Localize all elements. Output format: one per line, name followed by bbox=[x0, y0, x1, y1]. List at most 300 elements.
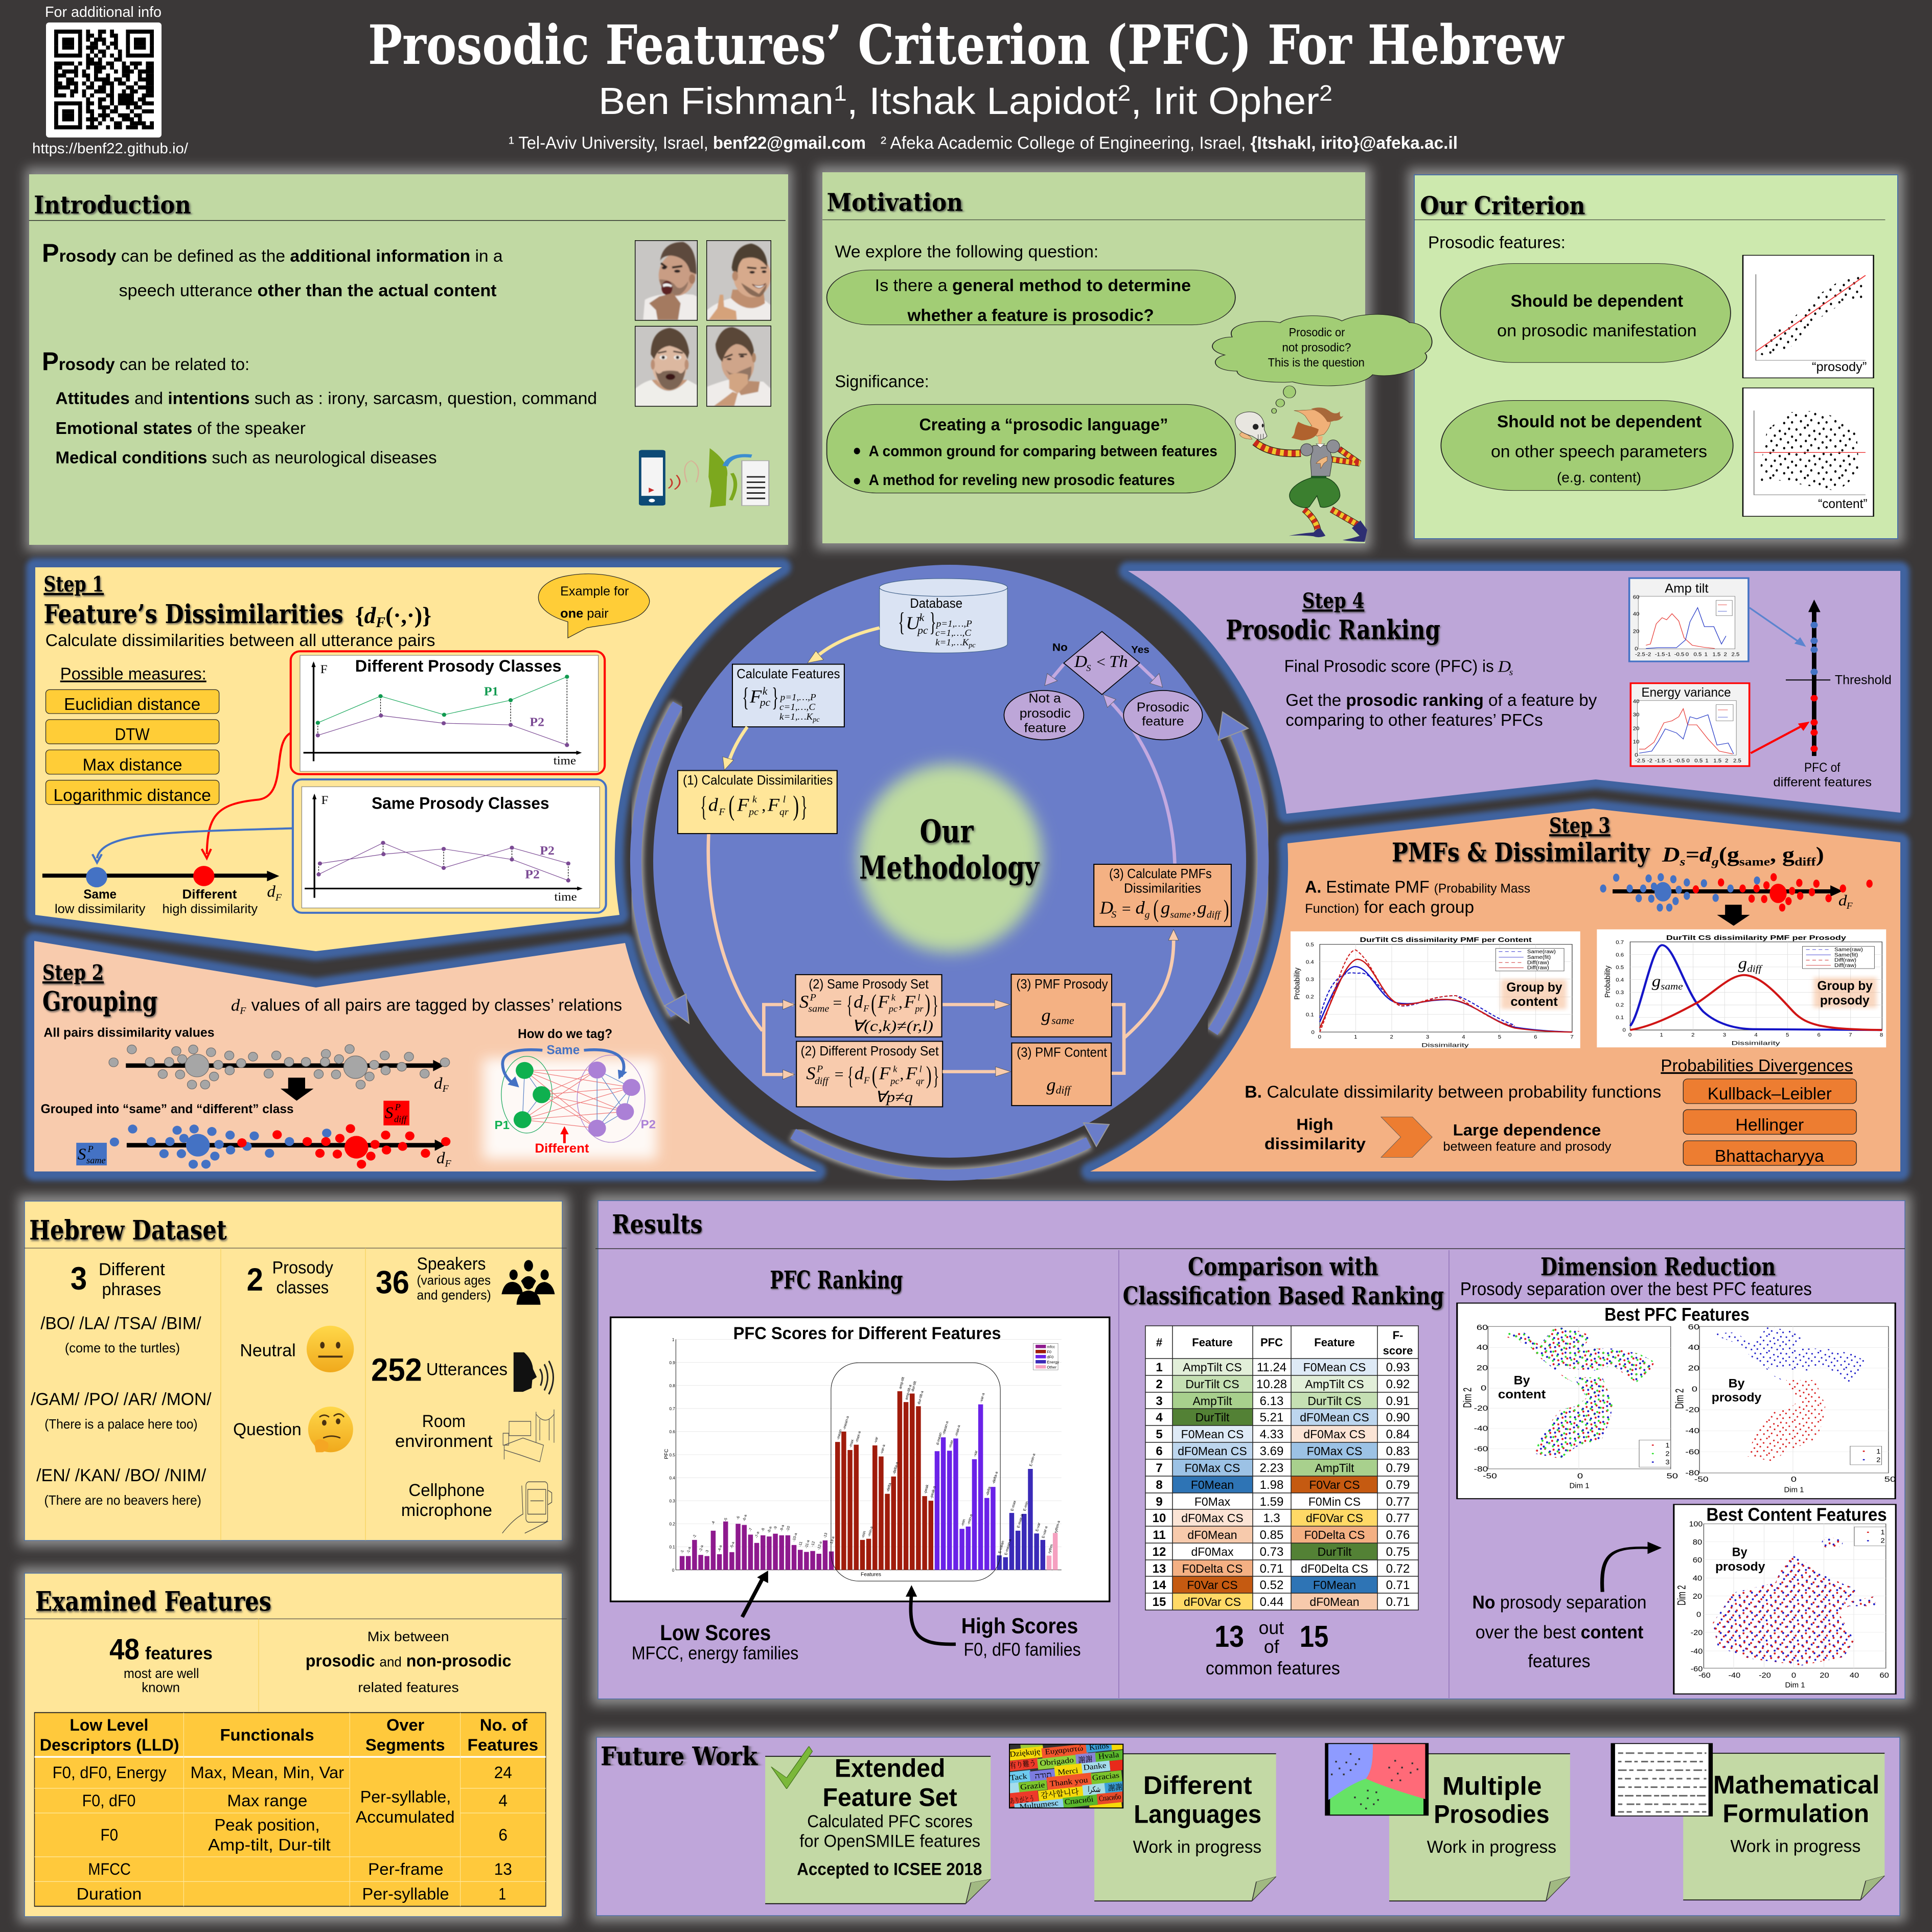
table: comparison ranking: 4 bbox=[1156, 1411, 1163, 1424]
table: comparison ranking: dF0Max CS bbox=[1181, 1511, 1244, 1525]
divergence buttons: Kullback–Leibler bbox=[1708, 1085, 1832, 1103]
bar labels: -4 bbox=[710, 1521, 716, 1525]
bar labels: -3 bbox=[704, 1550, 709, 1554]
column: speakers and utterances: Room bbox=[422, 1411, 466, 1431]
column: phrases: /GAM/ /PO/ /AR/ /MON/ bbox=[31, 1389, 212, 1409]
table: comparison ranking: Feature bbox=[1192, 1336, 1233, 1349]
chart: same prosody classes bbox=[293, 779, 606, 913]
table: comparison ranking: 11 bbox=[1153, 1528, 1166, 1542]
chart: different prosody classes: Different Prosody Classes bbox=[355, 657, 562, 676]
box: PMF Content bbox=[1011, 1043, 1111, 1106]
chart: different prosody classes: P1 bbox=[484, 685, 498, 698]
box: Different Prosody Set: F bbox=[863, 1075, 870, 1086]
chart: Energy variance: 2 bbox=[1725, 758, 1729, 764]
text: final prosodic score: D bbox=[1498, 658, 1511, 676]
chart: same prosody classes: time bbox=[554, 890, 577, 904]
table: comparison ranking: dF0Mean bbox=[1309, 1595, 1360, 1608]
box: Calculate Dissimilarities: d bbox=[708, 795, 718, 815]
scatter: by content: 1 bbox=[1665, 1441, 1670, 1449]
box: Different Prosody Set: S bbox=[806, 1063, 816, 1084]
math: Ds: diff bbox=[1795, 856, 1816, 868]
chart: different prosody classes: F bbox=[320, 662, 328, 676]
box: Different Prosody Set: d bbox=[855, 1063, 864, 1084]
bar labels: -min bbox=[960, 1519, 967, 1527]
axis: dF same vs different: d bbox=[267, 883, 276, 901]
text: high scores: High Scores bbox=[961, 1614, 1078, 1638]
scatter: by prosody: By bbox=[1729, 1376, 1745, 1390]
math: dF: (·,·)} bbox=[385, 603, 431, 629]
table: comparison ranking: dF0Mean bbox=[1187, 1528, 1237, 1542]
icon: phone listening bbox=[639, 450, 698, 505]
box: Same Prosody Set: S bbox=[799, 992, 809, 1012]
table: comparison ranking: 0.75 bbox=[1386, 1545, 1410, 1559]
table: comparison ranking: 0.83 bbox=[1386, 1444, 1410, 1458]
note: multiple prosodies bbox=[1389, 1754, 1570, 1901]
table: comparison ranking: F0Mean CS bbox=[1181, 1428, 1244, 1441]
table: comparison ranking: F0Var CS bbox=[1187, 1578, 1238, 1592]
column: speakers and utterances: Utterances bbox=[426, 1359, 508, 1379]
bar labels: -max bbox=[848, 1439, 855, 1448]
box: Same Prosody Set: ∀(c,k)≠(r,l) bbox=[852, 1017, 933, 1034]
legs bbox=[1304, 510, 1358, 530]
table: comparison ranking: F0Delta CS bbox=[1304, 1528, 1365, 1542]
image: thank you in many languages: شكرا bbox=[1088, 1785, 1100, 1794]
arrow: to content chart bbox=[1602, 1542, 1662, 1592]
table: comparison ranking: 12 bbox=[1153, 1545, 1166, 1559]
chart: Amp tilt: -1.5 bbox=[1655, 652, 1665, 658]
chart: best content features: 0 bbox=[1791, 1671, 1796, 1680]
chart: PFC scores bbox=[611, 1317, 1110, 1601]
table: feature breakdown: Duration bbox=[77, 1885, 142, 1903]
measure buttons: DTW bbox=[115, 725, 150, 744]
table: comparison ranking: 0.85 bbox=[1260, 1528, 1283, 1542]
scatter: by prosody: -40 bbox=[1685, 1427, 1699, 1435]
table: feature breakdown: Per-syllable bbox=[362, 1885, 449, 1903]
bar labels: -mean bbox=[836, 1429, 843, 1440]
chart: Energy variance: 40 bbox=[1633, 699, 1639, 704]
diagram: how do we tag: P1 bbox=[495, 1118, 510, 1132]
database bbox=[880, 579, 1007, 653]
text: dF values tagged: values of all pairs are tagged by classes’ relations bbox=[251, 996, 622, 1015]
bar labels: -7 bbox=[748, 1528, 753, 1532]
callout: example for one pair: Example for bbox=[560, 585, 629, 599]
table: feature breakdown: Over bbox=[386, 1716, 424, 1735]
affiliations: ² Afeka Academic College of Engineering, Israel, {Itshakl, irito}@afeka.ac.il bbox=[881, 133, 1458, 153]
box: Different Prosody Set: k bbox=[893, 1064, 898, 1074]
outcome: not a prosodic feature: prosodic bbox=[1020, 706, 1071, 721]
box: Same Prosody Set: { bbox=[846, 991, 853, 1019]
chart: Amp tilt: 1.5 bbox=[1713, 652, 1720, 658]
panel: Future Work: Languages bbox=[1134, 1800, 1261, 1828]
text: prosody definition: speech utterance other than the actual content bbox=[119, 281, 497, 300]
diagram: how do we tag: How do we tag? bbox=[518, 1027, 612, 1041]
box: Different Prosody Set: qr bbox=[916, 1076, 924, 1086]
chart: PFC scores: 0.9 bbox=[670, 1361, 675, 1365]
image: thank you in many languages: Danke bbox=[1083, 1761, 1107, 1772]
scatter: by content: -60 bbox=[1474, 1445, 1488, 1453]
heading: Introduction: Introduction bbox=[34, 191, 191, 219]
chart: PMF per prosody: 0 bbox=[1628, 1032, 1631, 1038]
table: comparison ranking: DurTilt CS bbox=[1185, 1377, 1239, 1391]
label: S diff: S bbox=[385, 1104, 393, 1122]
chart: same prosody classes: F bbox=[321, 794, 328, 807]
chart: PMF per prosody: 3 bbox=[1723, 1032, 1726, 1038]
arrow: red link to different bbox=[202, 733, 291, 858]
bar labels: -min-a bbox=[966, 1513, 974, 1525]
panel: Introduction bbox=[26, 168, 792, 551]
arrow: split into sets bbox=[764, 1000, 795, 1079]
arrow: database to features bbox=[808, 628, 880, 663]
column: phrases: (There is a palace here too) bbox=[44, 1417, 198, 1431]
bar labels: E-var bbox=[1034, 1522, 1042, 1532]
chart: PMF per prosody: g bbox=[1738, 955, 1747, 973]
scatter: by prosody: -80 bbox=[1685, 1469, 1699, 1477]
chart: Amp tilt: 40 bbox=[1633, 611, 1639, 617]
text: prosodic ranking: comparing to other features’ PFCs bbox=[1285, 710, 1543, 729]
bar labels: E-max bbox=[1009, 1500, 1017, 1511]
table: comparison ranking: 15 bbox=[1153, 1595, 1166, 1609]
bar labels: -var-a bbox=[978, 1392, 986, 1403]
measure buttons bbox=[46, 689, 219, 805]
heading: Step 4: Step 4 bbox=[1302, 589, 1364, 613]
box: Same Prosody Set: (2) Same Prosody Set bbox=[809, 976, 929, 992]
scatter: by prosody bbox=[1673, 1323, 1896, 1494]
table: comparison ranking: 1 bbox=[1156, 1361, 1163, 1374]
photo: thoughtful face bbox=[707, 326, 771, 406]
column: speakers and utterances: microphone bbox=[401, 1500, 492, 1520]
box: Calculate Features: c=1,…,C bbox=[779, 702, 816, 712]
label: S same: P bbox=[87, 1144, 94, 1154]
box: Same Prosody Set: F bbox=[904, 992, 916, 1012]
box: Calculate PMFs Dissimilarities: D bbox=[1099, 898, 1113, 917]
box: Same Prosody Set: ( bbox=[871, 989, 877, 1017]
text: low scores: MFCC, energy families bbox=[632, 1643, 798, 1664]
stat: 13 out of 15: out bbox=[1259, 1618, 1284, 1638]
scatter: by prosody: 60 bbox=[1688, 1323, 1699, 1331]
panel: Step 2 background bbox=[34, 941, 817, 1171]
scatter: by prosody: 2 bbox=[1876, 1456, 1880, 1464]
text: prosody definition bbox=[42, 239, 503, 300]
legend: PFC chart: Energy bbox=[1047, 1360, 1059, 1365]
table: comparison ranking: 3 bbox=[1156, 1394, 1163, 1408]
box: Calculate PMFs Dissimilarities: d bbox=[1135, 898, 1145, 917]
outcome: prosodic feature: Prosodic bbox=[1137, 701, 1189, 715]
table: comparison ranking: dF0Mean CS bbox=[1178, 1444, 1247, 1458]
image: thank you in many languages: 謝謝 bbox=[1078, 1755, 1093, 1765]
arrow: high scores bbox=[906, 1585, 956, 1644]
box: PMF Prosody bbox=[1011, 974, 1112, 1037]
chart: best content features: 40 bbox=[1693, 1574, 1702, 1583]
box: Different Prosody Set: ∀p≠q bbox=[875, 1089, 913, 1106]
box: Calculate PMFs Dissimilarities: Dissimilarities bbox=[1124, 881, 1201, 895]
box: Calculate Features: k=1,…K bbox=[779, 711, 813, 722]
column: prosody classes bbox=[233, 1257, 334, 1439]
scatter: by content: 60 bbox=[1477, 1324, 1488, 1332]
table: comparison ranking: F0Mean CS bbox=[1303, 1361, 1366, 1374]
box: Calculate PMFs Dissimilarities: same bbox=[1170, 910, 1191, 920]
chart: PMF per content: Same(fit) bbox=[1527, 955, 1551, 960]
axis: dF same vs different: Different bbox=[182, 888, 237, 902]
chart: Amp tilt: -1 bbox=[1666, 652, 1671, 658]
content: Step 3 bbox=[1245, 814, 1886, 1166]
pill: should not be dependent: on other speech parameters bbox=[1491, 442, 1707, 461]
chart: PMF per prosody: 0.4 bbox=[1616, 977, 1624, 983]
authors: 1 bbox=[834, 81, 847, 106]
table: comparison ranking: 4.33 bbox=[1260, 1428, 1283, 1441]
label: dF lower: d bbox=[436, 1149, 445, 1167]
methodology circle bbox=[653, 565, 1246, 1158]
bar labels: dur-tilt bbox=[910, 1381, 917, 1392]
legend: PFC chart: Other bbox=[1047, 1365, 1057, 1369]
box: Different Prosody Set: { bbox=[847, 1062, 854, 1090]
chart: Energy variance bbox=[1630, 683, 1750, 766]
bar labels: E-min-a bbox=[1028, 1453, 1037, 1467]
arrow: blue link to same bbox=[93, 829, 292, 863]
box: Calculate Dissimilarities: l bbox=[783, 794, 786, 805]
table: comparison ranking: DurTilt CS bbox=[1307, 1394, 1362, 1408]
table: comparison ranking: dF0Max bbox=[1191, 1545, 1234, 1558]
icon: group of people bbox=[501, 1260, 555, 1305]
bar labels: amp-tilt-a bbox=[904, 1384, 912, 1400]
chart: same prosody classes: P2 bbox=[540, 844, 555, 858]
column: phrases: (There are no beavers here) bbox=[44, 1493, 201, 1507]
bars: mfcc bbox=[680, 1522, 834, 1570]
box: Same Prosody Set: d bbox=[854, 992, 863, 1012]
icon: speaking head bbox=[514, 1352, 553, 1394]
chart: best content features: 80 bbox=[1693, 1538, 1702, 1547]
chart: best content features: 100 bbox=[1689, 1520, 1703, 1528]
affiliations bbox=[509, 133, 1458, 153]
decision: threshold diamond: S bbox=[1086, 663, 1091, 673]
stat: 13 out of 15 bbox=[1206, 1618, 1340, 1678]
text: low scores bbox=[632, 1621, 798, 1664]
table: comparison ranking: AmpTilt CS bbox=[1183, 1361, 1242, 1374]
text: no prosody separation bbox=[1473, 1592, 1646, 1671]
chart: best content features: 20 bbox=[1820, 1671, 1829, 1680]
image: thank you in many languages: Grazie bbox=[1020, 1781, 1045, 1792]
chart: best content features: -60 bbox=[1698, 1671, 1711, 1680]
table: comparison ranking: F- bbox=[1393, 1329, 1403, 1342]
bar labels: -peak-a bbox=[929, 1485, 937, 1499]
box: Calculate Dissimilarities: (1) Calculate Dissimilarities bbox=[683, 773, 833, 788]
box: Calculate Dissimilarities: pc bbox=[748, 807, 758, 817]
pill: main question: whether a feature is prosodic? bbox=[907, 306, 1154, 325]
chart: PMF per content: 0.4 bbox=[1306, 959, 1314, 965]
table: comparison ranking: dF0Var CS bbox=[1184, 1595, 1241, 1608]
box: Calculate PMFs Dissimilarities: g bbox=[1145, 910, 1150, 920]
text: low scores: Low Scores bbox=[660, 1621, 771, 1645]
text: prosody relations: Medical conditions such as neurological diseases bbox=[55, 448, 437, 467]
box: Calculate PMFs Dissimilarities: ( bbox=[1153, 894, 1159, 923]
column: speakers and utterances: Speakers bbox=[417, 1254, 486, 1274]
chart: PMF per prosody: diff bbox=[1747, 963, 1763, 974]
table: comparison ranking: F0Mean bbox=[1191, 1478, 1234, 1491]
chart: best content features: Dim 2 bbox=[1675, 1585, 1688, 1605]
chart: Amp tilt: Amp tilt bbox=[1665, 582, 1709, 595]
bar labels: -11 bbox=[797, 1541, 803, 1547]
bar labels: -2 bbox=[692, 1534, 697, 1538]
box: Calculate Dissimilarities: k bbox=[752, 794, 757, 805]
text: prosody relations bbox=[42, 347, 597, 467]
chart: PMF per content: 0.3 bbox=[1306, 977, 1314, 982]
box: Calculate Features: { bbox=[742, 682, 749, 712]
box: Calculate Features: k bbox=[763, 685, 768, 697]
arrow: big down bbox=[1717, 905, 1750, 926]
table: comparison ranking: 10 bbox=[1153, 1511, 1166, 1525]
diagram: how do we tag: P2 bbox=[641, 1118, 656, 1131]
database: k=1,…K bbox=[935, 637, 969, 648]
chart: PMF per content: 0.1 bbox=[1306, 1012, 1314, 1018]
bars: dF0 bbox=[935, 1405, 996, 1570]
table: comparison ranking: F0Var CS bbox=[1309, 1478, 1360, 1491]
chart: PMF per content: Group by bbox=[1506, 981, 1562, 995]
box: Calculate PMFs Dissimilarities: g bbox=[1161, 898, 1170, 917]
table: comparison ranking: 10.28 bbox=[1256, 1377, 1287, 1391]
outcome: not a prosodic feature bbox=[1004, 691, 1084, 740]
chart: PFC scores: 0.5 bbox=[670, 1453, 675, 1457]
box: Same Prosody Set: , bbox=[899, 994, 903, 1011]
column: speakers and utterances: Cellphone bbox=[408, 1480, 485, 1500]
table: comparison ranking: 0.77 bbox=[1386, 1495, 1410, 1509]
box: Calculate Dissimilarities: { bbox=[700, 791, 707, 822]
bar labels: -2-a bbox=[698, 1544, 704, 1552]
chart: Amp tilt: 2 bbox=[1724, 652, 1727, 658]
divergence buttons bbox=[1683, 1079, 1856, 1166]
box: Calculate Dissimilarities: , bbox=[762, 797, 766, 815]
box: Calculate Dissimilarities bbox=[678, 771, 837, 834]
label: dF upper bbox=[434, 1075, 449, 1094]
table: comparison ranking: AmpTilt bbox=[1315, 1461, 1354, 1475]
chart: Energy variance: -0.5 bbox=[1675, 758, 1685, 764]
outcome: prosodic feature bbox=[1123, 691, 1202, 740]
thought cloud: not prosodic? bbox=[1282, 341, 1351, 354]
scatter: by content: -50 bbox=[1483, 1472, 1497, 1480]
table: feature breakdown: Low Level bbox=[70, 1716, 148, 1735]
table: comparison ranking: 0.52 bbox=[1260, 1578, 1283, 1592]
chart: PMF per prosody: Diff(raw) bbox=[1834, 962, 1856, 969]
bar labels: -1-a bbox=[685, 1546, 692, 1554]
heading: Feature's Dissimilarities: Feature’s Dissimilarities bbox=[43, 599, 343, 630]
chart: best content features: 60 bbox=[1693, 1556, 1702, 1565]
legend: PFC chart: mfcc bbox=[1047, 1345, 1055, 1349]
table: comparison ranking: 1.3 bbox=[1263, 1511, 1280, 1525]
table: comparison ranking: F0Max CS bbox=[1307, 1444, 1362, 1458]
chart: PMF per content: 6 bbox=[1534, 1034, 1537, 1040]
table: feature breakdown: Peak position, bbox=[215, 1816, 320, 1834]
scatter: by content: Dim 1 bbox=[1570, 1482, 1590, 1490]
chart: PMF per content: Diff(raw) bbox=[1527, 965, 1549, 971]
scatter: by prosody: 0 bbox=[1692, 1385, 1697, 1393]
divergence buttons: Bhattacharyya bbox=[1715, 1147, 1824, 1166]
column: phrases: (come to the turtles) bbox=[65, 1341, 180, 1355]
heading: PFC Ranking: PFC Ranking bbox=[770, 1266, 903, 1295]
chart: PMF per content: 1 bbox=[1354, 1034, 1357, 1040]
breeches bbox=[1290, 478, 1340, 508]
box: Calculate Features: } bbox=[772, 682, 778, 712]
bar labels: -6 bbox=[735, 1515, 741, 1520]
box: Calculate PMFs Dissimilarities: diff bbox=[1207, 910, 1222, 920]
legend: PFC chart: dF0 bbox=[1047, 1355, 1053, 1360]
panel: Results bbox=[592, 1194, 1911, 1705]
bar labels: -11-a bbox=[803, 1539, 811, 1549]
chart: PMF per prosody: Group by bbox=[1818, 979, 1873, 993]
heading: Prosodic Ranking: Prosodic Ranking bbox=[1226, 614, 1440, 646]
image: thank you in many languages: Gracias bbox=[1092, 1771, 1120, 1782]
QR code bbox=[46, 22, 162, 137]
bar labels: -5 bbox=[723, 1517, 728, 1522]
arrow: high PFC link bbox=[1750, 608, 1806, 647]
table: comparison ranking: 9 bbox=[1156, 1495, 1163, 1509]
chart: PMF per prosody: 7 bbox=[1849, 1032, 1852, 1038]
panel: Future Work: Future Work bbox=[601, 1741, 758, 1771]
illustration: Hamlet holding skull bbox=[1235, 407, 1367, 542]
chart: PMF per content: Same(raw) bbox=[1527, 949, 1556, 955]
chart: PFC scores: 0.2 bbox=[670, 1522, 675, 1527]
database: pc bbox=[968, 641, 976, 649]
scatter: by prosody: 20 bbox=[1688, 1364, 1699, 1372]
chart: PFC scores: PFC Scores for Different Features bbox=[733, 1323, 1001, 1343]
chart: Energy variance: Energy variance bbox=[1641, 686, 1731, 699]
arm holding skull bbox=[1255, 442, 1301, 453]
icon: bedroom sketch bbox=[503, 1410, 554, 1462]
table: comparison ranking: DurTilt bbox=[1318, 1545, 1352, 1558]
chart: best content features: -60 bbox=[1691, 1665, 1703, 1673]
table: feature breakdown: No. of bbox=[480, 1716, 527, 1735]
thought cloud: This is the question bbox=[1268, 356, 1365, 369]
image: thank you in many languages: Thank you bbox=[1049, 1776, 1089, 1788]
box: Same Prosody Set: ) bbox=[925, 989, 930, 1017]
column: phrases: /EN/ /KAN/ /BO/ /NIM/ bbox=[36, 1465, 206, 1485]
heading: Our Methodology bbox=[859, 813, 1040, 886]
box: Calculate PMFs Dissimilarities: S bbox=[1111, 910, 1116, 920]
box: Different Prosody Set: } bbox=[933, 1062, 939, 1090]
decision: threshold diamond: < bbox=[1096, 654, 1106, 671]
table: feature breakdown: 13 bbox=[494, 1860, 512, 1879]
pill: should be dependent bbox=[1440, 264, 1731, 362]
text: calculate dissimilarity: B. Calculate dissimilarity between probability functions bbox=[1245, 1083, 1661, 1101]
panel: Hebrew Dataset bbox=[18, 1195, 568, 1547]
note: mathematical formulation bbox=[1683, 1753, 1884, 1900]
chart: best content features: prosody bbox=[1715, 1559, 1765, 1573]
database: { bbox=[898, 607, 905, 637]
chart: PFC scores: 0.6 bbox=[670, 1430, 675, 1434]
panel: Step 4 background bbox=[1128, 571, 1900, 814]
table: comparison ranking: 0.71 bbox=[1386, 1578, 1410, 1592]
table: feature breakdown: F0, dF0 bbox=[82, 1791, 135, 1810]
authors: , Itshak Lapidot bbox=[847, 80, 1118, 122]
bar labels: -min-a bbox=[866, 1526, 874, 1537]
heading: PMFs and Dissimilarity: PMFs & Dissimilarity bbox=[1392, 837, 1650, 868]
photo: surprised face bbox=[635, 326, 697, 406]
pill: main question: Is there a general method to determine bbox=[875, 276, 1191, 295]
table: comparison ranking: 0.71 bbox=[1386, 1595, 1410, 1609]
text: no prosody separation: features bbox=[1528, 1651, 1591, 1671]
text: large dependence: Large dependence bbox=[1453, 1121, 1601, 1139]
chart: Amp tilt: -2 bbox=[1646, 652, 1651, 658]
image: voronoi classes bbox=[1327, 1743, 1426, 1815]
box: PMF Content: diff bbox=[1056, 1084, 1072, 1096]
box: Different Prosody Set: l bbox=[919, 1064, 922, 1074]
text: question intro: We explore the following question: bbox=[835, 242, 1098, 262]
box: Calculate Dissimilarities: F bbox=[718, 807, 726, 817]
box: Calculate Dissimilarities: F bbox=[767, 795, 780, 815]
box: Different Prosody Set: P bbox=[816, 1064, 823, 1074]
axis: grouped dots: d bbox=[1838, 892, 1847, 909]
image: thank you in many languages bbox=[1009, 1744, 1123, 1808]
scatter: by prosody: Dim 2 bbox=[1673, 1389, 1686, 1409]
measure buttons: Max distance bbox=[83, 755, 182, 774]
table: comparison ranking: 0.90 bbox=[1386, 1411, 1410, 1424]
